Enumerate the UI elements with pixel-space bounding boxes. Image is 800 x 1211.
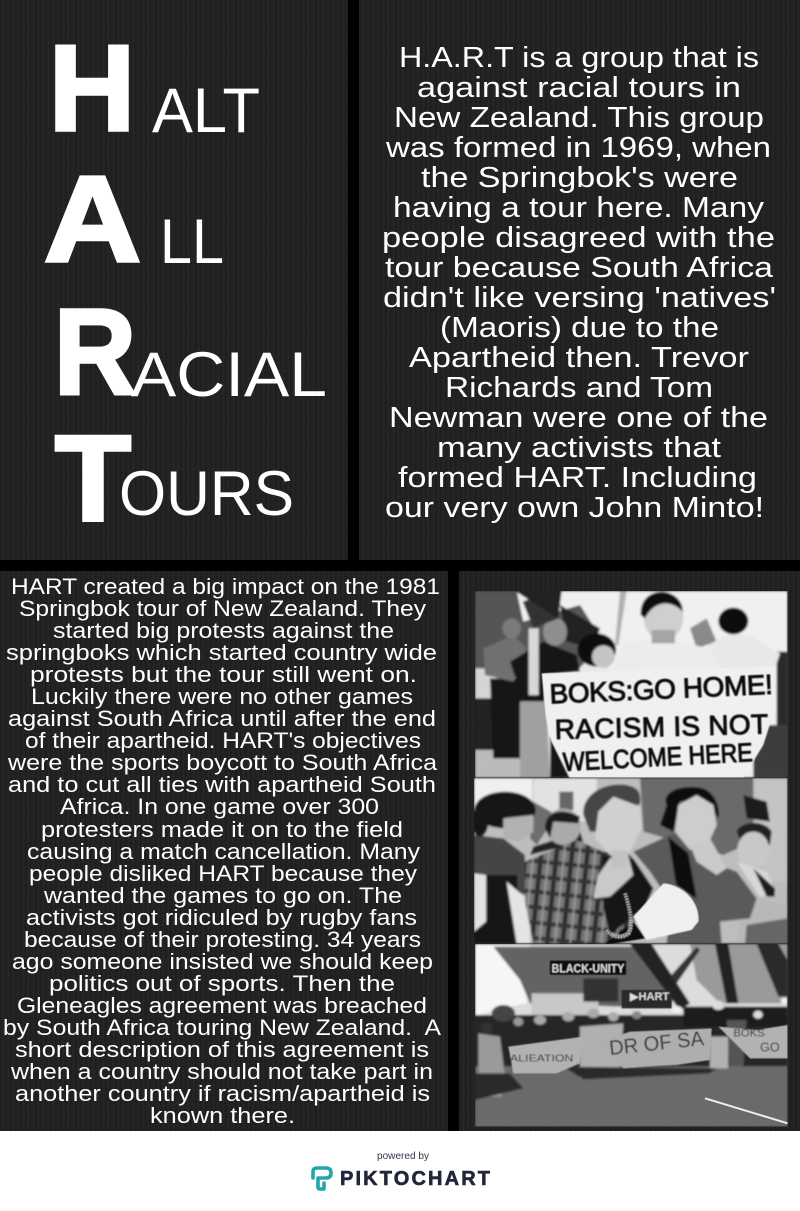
- panel: title: [0, 0, 348, 560]
- wordmark: PIKTOCHART: [340, 1168, 490, 1190]
- text block: impact of HART: politics out of sports. Then the: [49, 971, 395, 996]
- protest sign: WELCOME HERE: [562, 737, 753, 777]
- text block: about HART: was formed in 1969, when: [385, 132, 771, 164]
- letter A and LL: LL: [160, 207, 224, 277]
- text block: about HART: New Zealand. This group: [394, 102, 764, 134]
- text block: about HART: formed HART. Including: [398, 462, 757, 494]
- text block: about HART: Apartheid then. Trevor: [409, 342, 749, 374]
- text block: impact of HART: causing a match cancellation. Many: [27, 839, 421, 864]
- text block: impact of HART: of their apartheid. HART's objectives: [25, 728, 421, 753]
- letter R and ACIAL: [54, 284, 327, 420]
- text block: impact of HART: activists got ridiculed by rugby fans: [26, 905, 417, 930]
- letter H and ALT: H: [49, 20, 135, 156]
- text block: about HART: having a tour here. Many: [393, 192, 765, 224]
- text block: about HART: many activists that: [437, 432, 721, 464]
- text block: impact of HART: HART created a big impact on the 1981: [11, 574, 440, 599]
- road marking: [705, 1098, 788, 1123]
- text block: impact of HART: when a country should not take part in: [10, 1059, 433, 1084]
- letter T and OURS: T: [55, 410, 131, 546]
- protest banners: BOKS: [733, 1028, 765, 1040]
- Black Unity and HART placards: [550, 961, 672, 1008]
- Black Unity and HART placards: ▶HART: [629, 991, 670, 1003]
- letter H and ALT: ALT: [152, 76, 260, 146]
- text block: impact of HART: people disliked HART because they: [29, 861, 418, 886]
- protest sign: RACISM IS NOT: [554, 708, 768, 745]
- text block: about HART: (Maoris) due to the: [440, 312, 719, 344]
- text block: impact of HART: were the sports boycott to South Africa: [7, 750, 438, 775]
- text block: about HART: H.A.R.T is a group that is: [399, 42, 759, 74]
- text block: about HART: against racial tours in: [417, 72, 741, 104]
- text block: impact of HART: protesters made it on to the field: [41, 817, 403, 842]
- megaphone: [605, 882, 700, 944]
- letter T and OURS: [55, 410, 294, 546]
- letter H and ALT: [49, 20, 260, 156]
- protest banners: [508, 1025, 788, 1073]
- protest banners: DR OF SA: [608, 1027, 705, 1060]
- letter R and ACIAL: ACIAL: [131, 340, 327, 410]
- text block: impact of HART: Gleneagles agreement was breached: [17, 993, 427, 1018]
- text block: about HART: Newman were one of the: [389, 402, 768, 434]
- letter R and ACIAL: R: [54, 284, 136, 420]
- text block: impact of HART: by South Africa touring New Zealand. A: [3, 1015, 441, 1040]
- text block: about HART: the Springbok's were: [421, 162, 738, 194]
- text block: about HART: tour because South Africa: [385, 252, 774, 284]
- text block: impact of HART: wanted the games to go on. The: [43, 883, 402, 908]
- panel: impact of HART: [0, 571, 448, 1131]
- text block: impact of HART: against South Africa until after the end: [8, 706, 436, 731]
- protest sign: BOKS:GO HOME!: [549, 669, 773, 709]
- letter A and LL: [44, 151, 224, 287]
- text block: impact of HART: because of their protesting. 34 years: [24, 927, 421, 952]
- protest banners: GO: [760, 1041, 780, 1055]
- text block: about HART: didn't like versing 'natives': [383, 282, 776, 314]
- text block: about HART: [382, 42, 776, 524]
- text block: impact of HART: short description of this agreement is: [15, 1037, 429, 1062]
- text block: about HART: people disagreed with the: [382, 222, 775, 254]
- panel: photos: [459, 571, 800, 1131]
- text block: impact of HART: ago someone insisted we should keep: [12, 949, 433, 974]
- footer: Piktochart branding: [0, 1131, 800, 1211]
- text block: impact of HART: springboks which started country wide: [6, 640, 437, 665]
- protest banners: ALIEATION: [510, 1054, 573, 1065]
- Black Unity and HART placards: BLACK-UNITY: [552, 962, 624, 976]
- text block: impact of HART: and to cut all ties with apartheid South: [8, 772, 436, 797]
- text block: impact of HART: Springbok tour of New Zealand. They: [19, 596, 427, 621]
- text block: impact of HART: Luckily there were no other games: [31, 684, 413, 709]
- powered by label: powered by: [377, 1150, 430, 1162]
- icon: Piktochart logo: [313, 1168, 331, 1189]
- text block: impact of HART: protests but the tour still went on.: [30, 662, 417, 687]
- text block: impact of HART: known there.: [150, 1103, 295, 1128]
- text block: about HART: Richards and Tom: [445, 372, 713, 404]
- text block: impact of HART: started big protests against the: [53, 618, 394, 643]
- text block: about HART: our very own John Minto!: [385, 492, 764, 524]
- protest sign: [542, 667, 775, 778]
- letter T and OURS: OURS: [119, 459, 294, 529]
- photo: BOKS GO HOME protest sign: [475, 591, 788, 778]
- text block: impact of HART: Africa. In one game over 300: [60, 794, 379, 819]
- letter A and LL: A: [44, 151, 141, 287]
- photo: Black Unity march with banner: [475, 944, 788, 1127]
- text block: impact of HART: another country if racism/apartheid is: [15, 1081, 430, 1106]
- panel: about HART: [359, 0, 800, 560]
- text block: impact of HART: [3, 574, 441, 1128]
- photo: man speaking into megaphone: [472, 778, 788, 944]
